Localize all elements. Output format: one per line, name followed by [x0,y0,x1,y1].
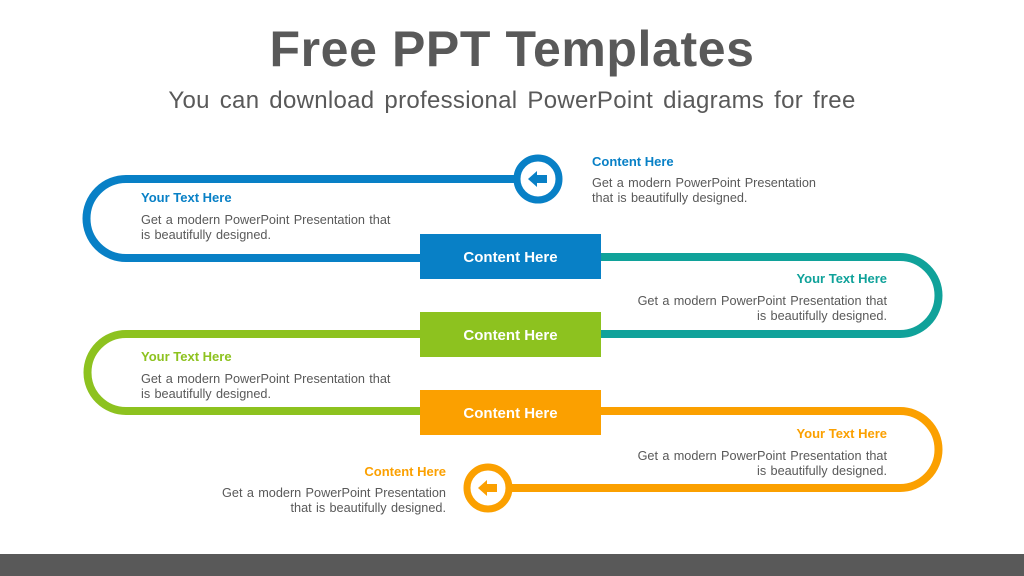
subtitle: You can download professional PowerPoint diagrams for free [168,87,856,114]
text: top right [592,154,816,205]
text: green: Your Text Here [141,349,232,364]
text: blue: is beautifully designed. [141,228,271,242]
text: bottom left: that is beautifully designed. [291,501,446,515]
text: top right: Content Here [592,154,674,169]
text: orange: is beautifully designed. [757,464,887,478]
box: orange: Content Here [463,404,558,422]
text: teal: Your Text Here [796,271,887,286]
box: blue [420,234,601,279]
path: green [88,334,430,411]
icon: orange arrow circle [467,467,509,509]
text: top right: Get a modern PowerPoint Presentation [592,176,816,190]
box: orange [420,390,601,435]
text: orange [638,426,887,478]
text: blue: Get a modern PowerPoint Presentation that [141,213,390,227]
path: orange [510,411,938,488]
text: blue: Your Text Here [141,190,232,205]
box: green [420,312,601,357]
footer bar [0,554,1024,576]
text: teal: is beautifully designed. [757,309,887,323]
box: green: Content Here [463,326,558,344]
path: teal [600,257,938,334]
text: blue [141,190,390,242]
text: bottom left: Get a modern PowerPoint Presentation [222,486,446,500]
text: teal [638,271,887,323]
title: Free PPT Templates [269,21,755,77]
text: orange: Your Text Here [796,426,887,441]
text: bottom left [222,464,446,515]
icon: blue arrow circle [517,158,559,200]
text: green: Get a modern PowerPoint Presentation that [141,372,390,386]
text: orange: Get a modern PowerPoint Presentation that [638,449,887,463]
path: blue [86,179,516,258]
box: blue: Content Here [463,248,558,266]
text: teal: Get a modern PowerPoint Presentation that [638,294,887,308]
text: bottom left: Content Here [364,464,446,479]
text: green [141,349,390,401]
text: green: is beautifully designed. [141,387,271,401]
text: top right: that is beautifully designed. [592,191,747,205]
